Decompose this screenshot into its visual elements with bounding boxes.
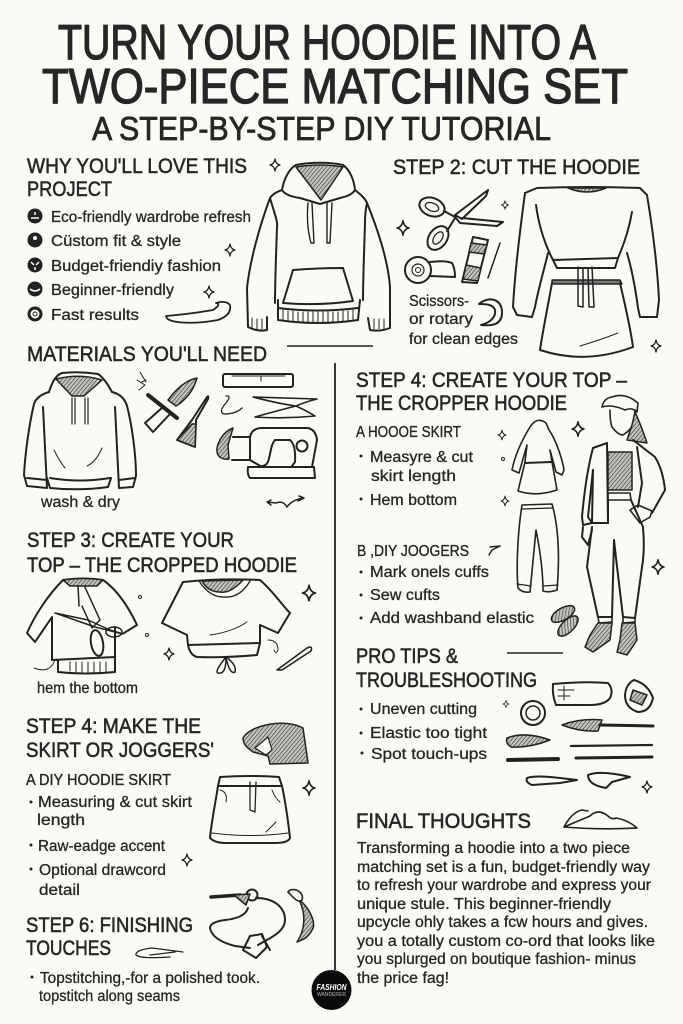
panel: final thoughts: FINAL THOUGHTS: [356, 810, 531, 833]
decorative sparkles: [138, 159, 664, 866]
text: scissors note: [409, 293, 518, 348]
icon: small pencil: [489, 546, 500, 555]
skirt steps list: Optional drawcord: [39, 862, 166, 879]
panel: step 3: [27, 529, 297, 577]
icon: large hoodie: [247, 163, 390, 331]
list: hoodie skirt steps: Measyre & cut: [370, 449, 474, 466]
icon: crescent: [288, 890, 314, 942]
icon: scissors: [417, 190, 503, 254]
panel: pro tips and troubleshooting: Spot touch-ups: [371, 746, 487, 763]
icon: needle and thread: [268, 640, 312, 670]
icon: curl swoosh: [166, 302, 230, 323]
logo badge: [312, 970, 352, 1010]
panel: materials heading: MATERIALS YOU'LL NEED: [27, 343, 267, 366]
text: closing paragraph: you splurged on boutique fashion- minus: [357, 951, 636, 968]
panel: step 4 create your top: [356, 369, 627, 627]
icon: sewing machine: [217, 428, 317, 478]
panel: pro tips and troubleshooting: TROUBLESHOOTING: [356, 669, 537, 692]
list: hoodie skirt steps: skirt length: [371, 468, 456, 485]
text: closing paragraph: Transforming a hoodie into a two piece: [357, 840, 630, 857]
panel: step 6 finishing touches: topstitch along seams: [39, 988, 180, 1005]
icon: cropped hoodie: [162, 579, 290, 673]
panel: step 4 create your top: STEP 4: CREATE YOUR TOP –: [356, 369, 627, 392]
benefit list: Beginner-friendly: [51, 282, 174, 299]
text: closing paragraph: the price fag!: [357, 970, 449, 987]
list: joggers steps: Add washband elastic: [370, 610, 534, 627]
text: closing paragraph: to refresh your wardrobe and express your: [357, 877, 651, 894]
panel: step 2 heading: STEP 2: CUT THE HOODIE: [393, 156, 640, 179]
list: joggers steps: Mark onels cuffs: [370, 564, 489, 581]
icon: small arrow: [267, 496, 304, 507]
panel: final thoughts: [356, 810, 655, 987]
panel: step 3: TOP – THE CROPPED HOODIE: [27, 554, 297, 577]
benefit list: Budget-friendiy fashion: [51, 258, 221, 275]
panel: step 3: STEP 3: CREATE YOUR: [27, 529, 234, 552]
title: A STEP-BY-STEP DIY TUTORIAL: [92, 110, 551, 147]
list: hoodie skirt steps: [360, 449, 474, 509]
title: [42, 16, 628, 147]
icon: ruler: [223, 374, 293, 387]
text: scissors note: for clean edges: [409, 331, 518, 348]
text: scissors note: or rotary: [409, 311, 473, 328]
panel: step 4 create your top: B ,DIY JOOGERS: [357, 543, 469, 560]
icon: cropped sweatshirt and skirt: [513, 187, 659, 357]
panel: pro tips and troubleshooting: Elastic too tight: [370, 725, 488, 742]
list: hoodie skirt steps: Hem bottom: [370, 492, 457, 509]
text: closing paragraph: matching set is a fun, budget-friendly way: [357, 859, 650, 876]
skirt steps list: detail: [39, 882, 80, 899]
icon: swirl: [479, 299, 502, 325]
icon: shears: [221, 396, 317, 418]
icon: squiggle line: [136, 948, 183, 958]
panel: why you'll love this project: PROJECT: [27, 178, 112, 201]
skirt steps list: Raw-eadge accent: [38, 838, 166, 855]
icon: finishing tools: [210, 890, 285, 958]
icon: slippers: [549, 602, 581, 639]
panel: pro tips and troubleshooting: Uneven cutting: [370, 701, 477, 718]
benefit list: Fast results: [51, 307, 139, 324]
logo badge: FASHION: [316, 983, 347, 992]
benefit list: [51, 209, 251, 324]
illustration: standing woman in set: [582, 395, 665, 655]
panel: step 6 finishing touches: STEP 6: FINISHING: [26, 914, 193, 937]
icon: joggers: [517, 504, 558, 592]
list: joggers steps: [360, 564, 534, 627]
icon: cloud: [564, 810, 637, 829]
icon: thread and tools: [405, 237, 500, 283]
benefit icons: [28, 208, 42, 322]
icon: small hoodie dress: [512, 420, 564, 494]
icon: mini skirt: [210, 776, 290, 843]
icon: folded fabric: [243, 723, 308, 764]
skirt steps list: [30, 794, 193, 899]
benefit list: Eco-friendly wardrobe refresh: [51, 209, 251, 226]
text: scissors note: Scissors-: [409, 293, 469, 310]
text: closing paragraph: [357, 840, 655, 987]
skirt steps list: length: [37, 812, 85, 829]
title: TWO-PIECE MATCHING SET: [42, 60, 628, 114]
icon: hoodie being cut: [27, 578, 137, 674]
panel: pro tips and troubleshooting: PRO TIPS &: [356, 645, 458, 668]
icon: materials hoodie: [24, 372, 136, 489]
text: closing paragraph: you a totally custom co-ord that looks like: [357, 933, 655, 950]
panel: step 4 make the skirt or joggers: [26, 715, 214, 899]
panel: pro tips and troubleshooting: [356, 645, 537, 763]
panel: step 6 finishing touches: TOUCHES: [26, 937, 111, 960]
icons: sewing notions: [506, 680, 653, 788]
text: hem the bottom: hem the bottom: [37, 680, 138, 697]
panel: step 6 finishing touches: [26, 914, 260, 1005]
text: wash and dry: wash & dry: [40, 494, 120, 511]
skirt steps list: Measuring & cut skirt: [38, 794, 193, 811]
benefit list: Cüstom fit & style: [51, 233, 181, 250]
text: closing paragraph: upcycle ohly takes a fcw hours and gives.: [357, 914, 648, 931]
icon: sewing tools: [137, 372, 208, 447]
panel: step 4 make the skirt or joggers: STEP 4: MAKE THE: [26, 715, 201, 738]
panel: step 4 create your top: A HOOOE SKIRT: [356, 424, 461, 441]
panel: why you'll love this project: [27, 155, 251, 324]
panel: step 4 create your top: THE CROPPER HOODIE: [356, 392, 567, 415]
panel: why you'll love this project: WHY YOU'LL LOVE THIS: [27, 155, 247, 178]
panel: step 6 finishing touches: Topstitching,-for a polished took.: [40, 970, 260, 987]
panel: step 4 make the skirt or joggers: A DIY HOODIE SKIRT: [26, 772, 171, 789]
panel: step 4 make the skirt or joggers: SKIRT OR JOGGERS': [26, 739, 214, 762]
logo badge: WANDERER: [317, 992, 346, 998]
list: joggers steps: Sew cufts: [370, 587, 440, 604]
text: closing paragraph: unique stule. This beginner-friendly: [357, 896, 611, 913]
